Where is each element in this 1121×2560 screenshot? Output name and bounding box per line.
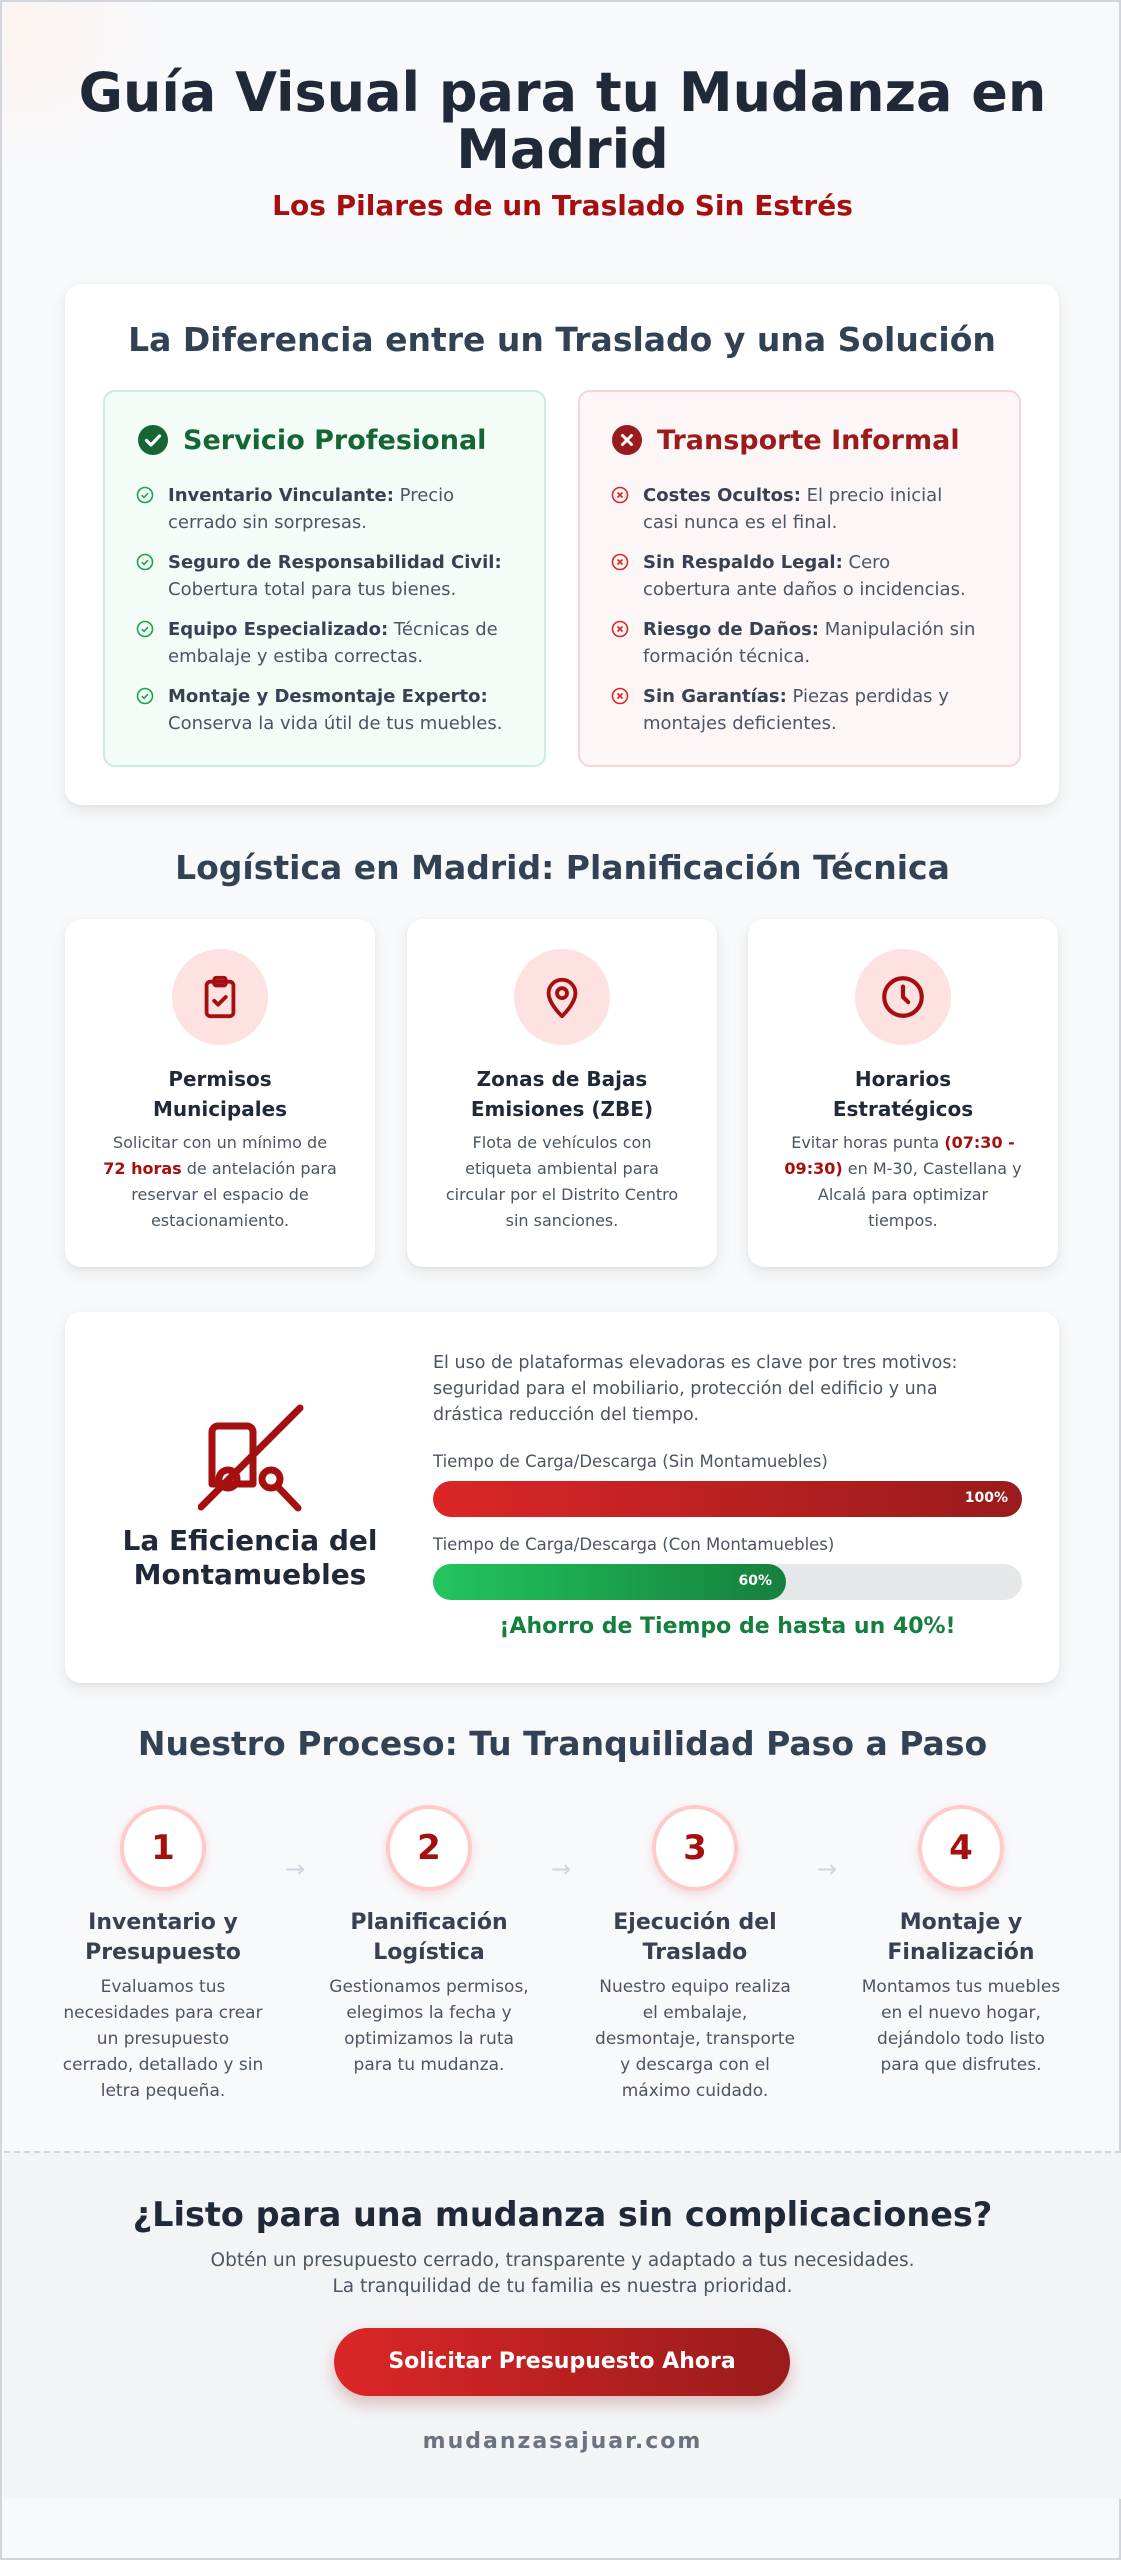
list: profesional items: Inventario Vinculante: Precio cerrado sin sorpresas. xyxy=(168,485,454,533)
panel: zbe: Flota de vehículos con etiqueta ambiental para circular por el Distrito Centro sin sanciones. xyxy=(446,1133,678,1230)
comparison heading: La Diferencia entre un Traslado y una Solución xyxy=(128,320,996,359)
panel: cta footer xyxy=(4,2151,1121,2499)
panel: comparison xyxy=(65,284,1059,805)
step 4: Montamos tus muebles en el nuevo hogar, dejándolo todo listo para que disfrutes. xyxy=(862,1977,1060,2075)
title: Madrid xyxy=(456,118,669,181)
heading: transporte informal: Transporte Informal xyxy=(657,424,960,456)
button: Solicitar Presupuesto Ahora xyxy=(388,2349,736,2374)
montamuebles title: La Eficiencia del xyxy=(123,1524,377,1557)
step 1 xyxy=(63,1805,263,2101)
step 4: Finalización xyxy=(887,1940,1035,1965)
step 2: 2 xyxy=(417,1828,441,1868)
domain: mudanzasajuar.com xyxy=(423,2429,702,2454)
panel: horarios: tiempos. xyxy=(868,1211,938,1230)
step 4: Montaje y xyxy=(900,1910,1022,1935)
step 3: Ejecución del xyxy=(613,1910,777,1935)
panel: transporte informal xyxy=(578,390,1021,767)
panel: montamuebles xyxy=(65,1312,1059,1683)
list: informal items: Costes Ocultos: El precio inicial casi nunca es el final. xyxy=(643,485,942,533)
bar chart: tiempos: Tiempo de Carga/Descarga (Sin Montamuebles) xyxy=(433,1452,828,1471)
step 1: Inventario y xyxy=(88,1910,238,1935)
heading: proceso: Nuestro Proceso: Tu Tranquilidad Paso a Paso xyxy=(138,1724,987,1763)
list: profesional items: Equipo Especializado: Técnicas de embalaje y estiba correctas. xyxy=(168,619,498,667)
step 2: Gestionamos permisos, elegimos la fecha y optimizamos la ruta para tu mudanza. xyxy=(329,1977,529,2075)
heading: servicio profesional: Servicio Profesional xyxy=(183,424,486,456)
panel: horarios: Evitar horas punta (07:30 - 09:30) en M-30, Castellana y Alcalá para optimizar xyxy=(784,1133,1022,1204)
arrow 2: → xyxy=(551,1855,571,1883)
icon: clipboard xyxy=(172,949,268,1045)
panel: permisos municipales: Solicitar con un mínimo de 72 horas de antelación para reservar el espacio de estacionamiento. xyxy=(103,1133,337,1230)
list: informal items xyxy=(612,485,975,734)
bar chart: tiempos: 100% xyxy=(965,1490,1008,1506)
list: profesional items xyxy=(136,485,502,734)
button xyxy=(334,2328,790,2396)
cta text: Obtén un presupuesto cerrado, transparente y adaptado a tus necesidades. xyxy=(211,2250,914,2271)
cta heading: ¿Listo para una mudanza sin complicaciones? xyxy=(133,2195,992,2234)
montamuebles title: Montamuebles xyxy=(134,1558,366,1591)
step 2: Logística xyxy=(373,1940,485,1965)
arrow 3: → xyxy=(817,1855,837,1883)
panel: permisos municipales xyxy=(65,919,375,1267)
panel: horarios: Horarios xyxy=(855,1067,951,1091)
bar chart: tiempos: 60% xyxy=(738,1573,772,1589)
panel: permisos municipales: Municipales xyxy=(153,1097,287,1121)
callout: ahorro: ¡Ahorro de Tiempo de hasta un 40%! xyxy=(499,1614,956,1639)
step 4 xyxy=(862,1805,1060,2075)
panel: horarios: Estratégicos xyxy=(833,1097,973,1121)
cta text: La tranquilidad de tu familia es nuestra prioridad. xyxy=(332,2276,793,2297)
panel: zbe: Emisiones (ZBE) xyxy=(471,1097,653,1121)
icon: map pin xyxy=(514,949,610,1045)
list: informal items: Sin Respaldo Legal: Cero cobertura ante daños o incidencias. xyxy=(643,552,966,600)
list: informal items: Sin Garantías: Piezas perdidas y montajes deficientes. xyxy=(643,686,949,734)
title: Guía Visual para tu Mudanza en xyxy=(79,61,1046,124)
montamuebles text: El uso de plataformas elevadoras es clave por tres motivos: seguridad para el mobiliario, protección del edificio y una drástica reducción del tiempo. xyxy=(433,1353,957,1425)
panel: horarios xyxy=(748,919,1058,1267)
step 3: Traslado xyxy=(643,1940,747,1965)
step 1: Presupuesto xyxy=(85,1940,241,1965)
icon: clock xyxy=(855,949,951,1045)
heading: logística: Logística en Madrid: Planificación Técnica xyxy=(175,848,950,887)
subtitle: Los Pilares de un Traslado Sin Estrés xyxy=(272,189,853,222)
step 1: 1 xyxy=(151,1828,175,1868)
step 4: 4 xyxy=(949,1828,973,1868)
cta text xyxy=(211,2250,914,2297)
panel: permisos municipales: Permisos xyxy=(168,1067,272,1091)
list: profesional items: Seguro de Responsabilidad Civil: Cobertura total para tus bienes. xyxy=(168,552,502,600)
arrow 1: → xyxy=(285,1855,305,1883)
panel: servicio profesional xyxy=(103,390,546,767)
title xyxy=(79,61,1046,181)
step 2 xyxy=(329,1805,529,2075)
bar chart: tiempos: Tiempo de Carga/Descarga (Con Montamuebles) xyxy=(433,1535,834,1554)
list: profesional items: Montaje y Desmontaje Experto: Conserva la vida útil de tus muebles. xyxy=(168,686,502,734)
step 3: Nuestro equipo realiza el embalaje, desmontaje, transporte y descarga con el máximo cuidado. xyxy=(595,1977,795,2101)
step 2: Planificación xyxy=(350,1910,508,1935)
panel: zbe: Zonas de Bajas xyxy=(477,1067,647,1091)
bar chart: tiempos xyxy=(432,1452,1022,1639)
panel: zbe xyxy=(407,919,717,1267)
list: informal items: Riesgo de Daños: Manipulación sin formación técnica. xyxy=(643,619,975,667)
step 1: Evaluamos tus necesidades para crear un presupuesto cerrado, detallado y sin letra pequeña. xyxy=(63,1977,263,2101)
icon: montamuebles xyxy=(198,1404,304,1512)
step 3: 3 xyxy=(683,1828,707,1868)
montamuebles title xyxy=(123,1524,377,1591)
step 3 xyxy=(595,1805,795,2101)
